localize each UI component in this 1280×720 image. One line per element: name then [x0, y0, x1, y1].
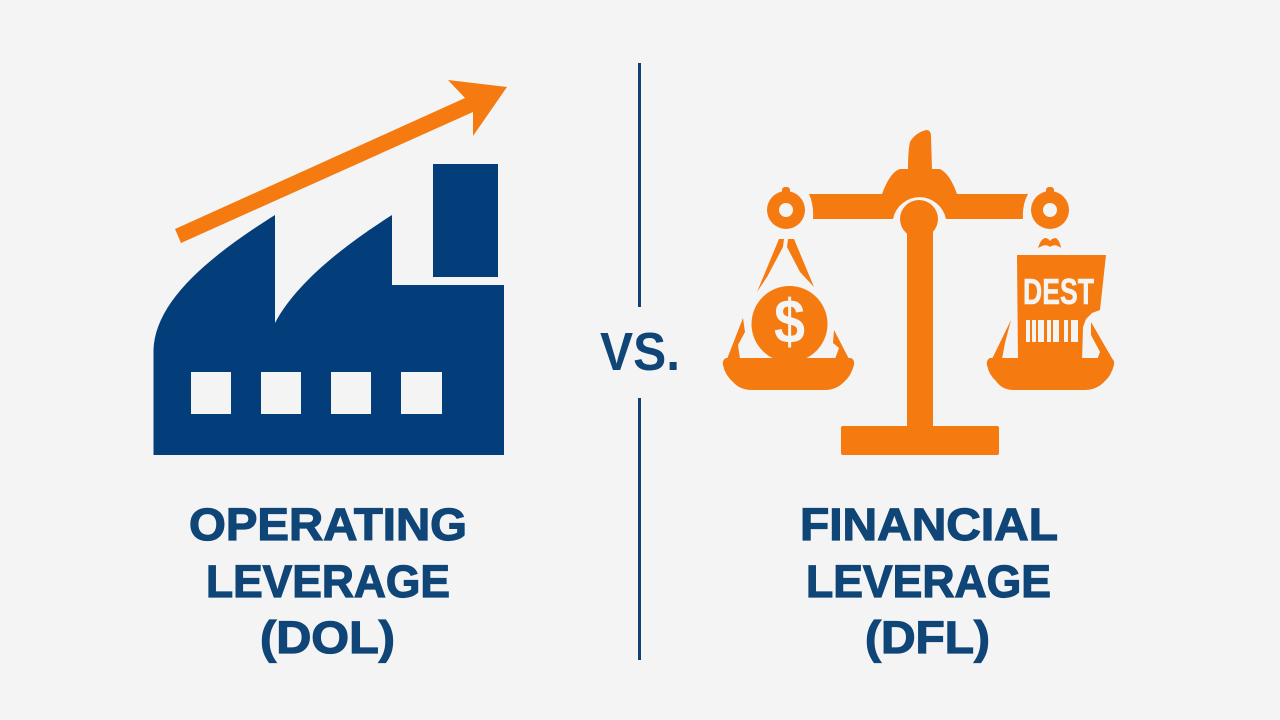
heading: financial leverage: LEVERAGE	[806, 556, 1051, 607]
coin	[752, 286, 828, 362]
scale pivot	[900, 200, 938, 238]
document bars	[1026, 320, 1078, 342]
debt document: DEST	[1023, 271, 1094, 312]
scale base	[841, 426, 999, 455]
right pan hanger	[1038, 238, 1061, 248]
right ring	[1031, 187, 1069, 229]
heading: financial leverage: FINANCIAL	[800, 499, 1058, 550]
factory windows	[191, 372, 442, 414]
left pan	[723, 318, 854, 390]
left ring	[767, 187, 805, 229]
icon: factory	[154, 164, 504, 455]
factory chimney	[433, 164, 498, 277]
debt document	[1017, 255, 1106, 362]
arrow: rising growth	[175, 80, 507, 243]
divider: lower	[638, 398, 641, 660]
icon: balance scale	[723, 130, 1114, 455]
heading: operating leverage: OPERATING	[189, 499, 467, 550]
heading: operating leverage	[189, 499, 467, 663]
heading: financial leverage: (DFL)	[865, 612, 990, 663]
scale post	[907, 225, 933, 430]
divider: upper	[638, 63, 641, 307]
right pan	[987, 320, 1114, 390]
heading: operating leverage: (DOL)	[260, 612, 395, 663]
heading: operating leverage: LEVERAGE	[206, 556, 450, 607]
vs label: VS.	[600, 322, 680, 382]
scale finial	[908, 130, 932, 170]
coin: $	[774, 288, 805, 357]
left pan strings	[757, 239, 814, 292]
heading: financial leverage	[800, 499, 1058, 663]
scale dome and beam	[809, 169, 1028, 219]
